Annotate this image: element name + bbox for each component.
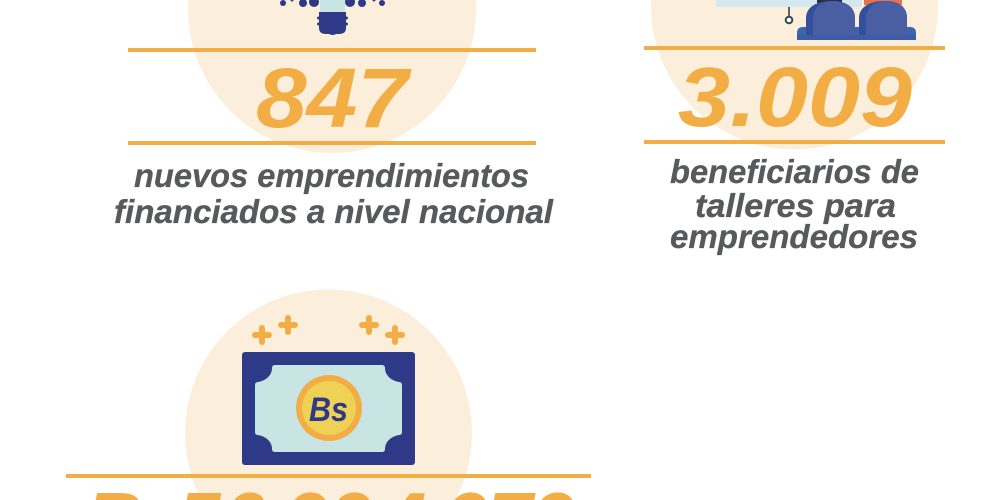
background circle [185, 290, 472, 500]
background circle [188, 0, 476, 153]
rule above number [66, 474, 591, 478]
panel: monto en bolívares [66, 290, 591, 500]
description: financiados a nivel nacional [114, 193, 554, 230]
coin [296, 375, 362, 441]
description: talleres para [695, 187, 896, 224]
description: emprendedores [670, 218, 918, 255]
rule below number [644, 140, 945, 144]
panel: nuevos emprendimientos [114, 0, 554, 230]
icon: banknote [242, 352, 415, 465]
description: nuevos emprendimientos [134, 157, 529, 194]
rule above number [128, 48, 536, 52]
icon: sparkle plus signs [255, 318, 402, 342]
icon: light bulb [280, 0, 385, 35]
number: 847: 847 [256, 51, 412, 145]
coin: Bs [309, 391, 348, 429]
rule above number [644, 46, 945, 50]
icon: presentation screen and audience [716, 0, 916, 40]
rule below number [128, 141, 536, 145]
description [670, 153, 919, 255]
description: beneficiarios de [670, 153, 919, 190]
description [114, 157, 554, 230]
background circle [651, 0, 938, 150]
number: 3.009: 3.009 [678, 50, 912, 144]
panel: beneficiarios de talleres [644, 0, 945, 255]
